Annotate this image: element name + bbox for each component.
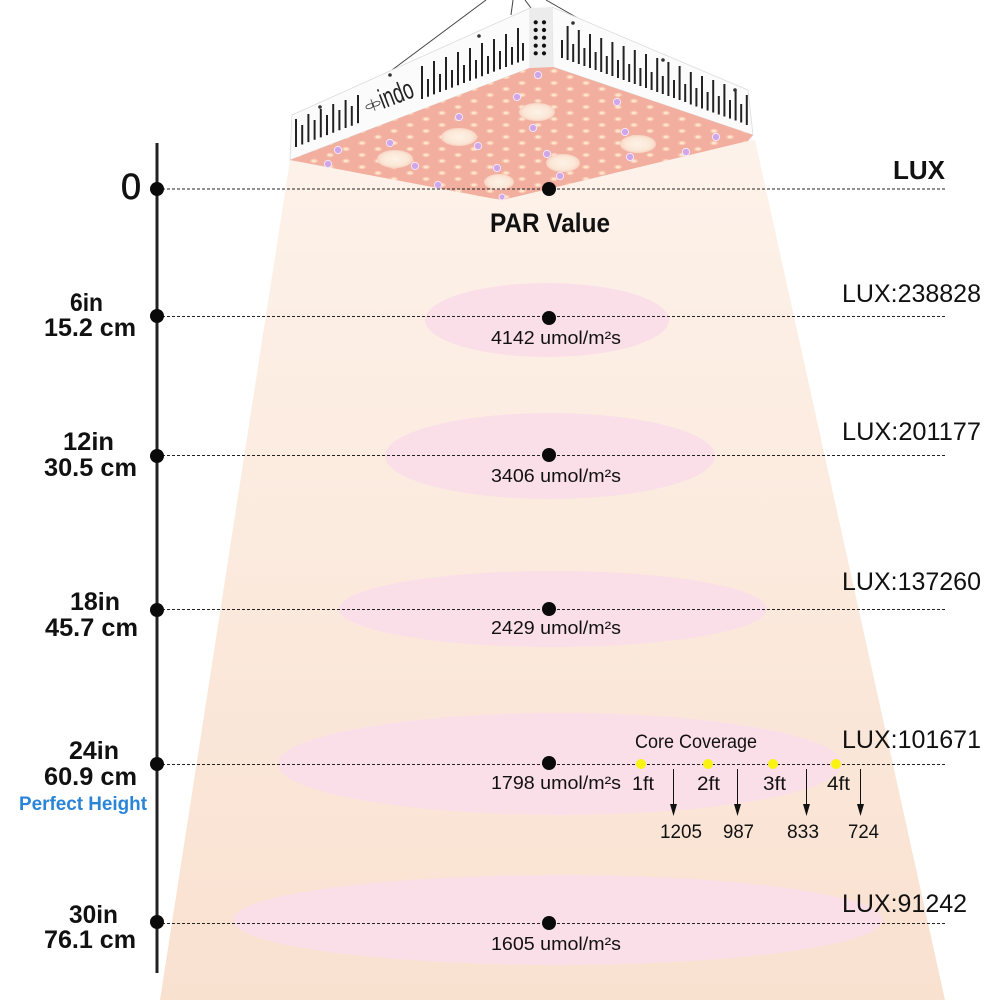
LUX values: LUX:101671 bbox=[842, 726, 981, 754]
coverage ellipses bbox=[233, 283, 883, 965]
distance labels: 3ft bbox=[763, 774, 787, 795]
height labels: 30in bbox=[69, 901, 118, 929]
PAR values: 1798 umol/m²s bbox=[491, 773, 621, 793]
height labels: 24in bbox=[69, 737, 119, 765]
perfect height callout: Perfect Height bbox=[19, 794, 148, 815]
distance labels bbox=[632, 774, 851, 795]
LUX values bbox=[842, 280, 981, 918]
height labels: 15.2 cm bbox=[44, 314, 136, 342]
light beam bbox=[160, 140, 945, 1000]
grow light fixture bbox=[290, 0, 753, 200]
height labels: 6in bbox=[70, 289, 103, 317]
distance labels: 2ft bbox=[697, 774, 721, 795]
LUX values: LUX:137260 bbox=[842, 568, 981, 596]
LED panel bbox=[290, 67, 753, 200]
fixture housing faces bbox=[290, 8, 530, 160]
coverage values: 724 bbox=[848, 822, 879, 843]
vertical height axis bbox=[156, 143, 158, 973]
coverage values: 987 bbox=[723, 822, 754, 843]
height labels: 18in bbox=[70, 588, 120, 616]
screws bbox=[318, 21, 737, 109]
PAR values: 4142 umol/m²s bbox=[491, 328, 621, 348]
brand logo bbox=[364, 73, 418, 115]
core coverage detail bbox=[632, 732, 879, 843]
height labels: 30.5 cm bbox=[44, 454, 137, 482]
LUX values: LUX:201177 bbox=[842, 418, 981, 446]
core coverage heading: Core Coverage bbox=[635, 732, 757, 753]
LUX heading: LUX bbox=[893, 155, 946, 185]
dashed level lines bbox=[157, 189, 946, 924]
center vent holes bbox=[534, 20, 546, 55]
arrows bbox=[670, 769, 864, 816]
height labels: 76.1 cm bbox=[44, 926, 136, 954]
hanging wires bbox=[392, 0, 588, 70]
distance labels: 1ft bbox=[632, 774, 655, 795]
height labels: 0 bbox=[121, 166, 141, 207]
center dots bbox=[542, 182, 556, 930]
coverage values: 833 bbox=[787, 822, 819, 843]
PAR values: 2429 umol/m²s bbox=[491, 618, 621, 638]
distance labels: 4ft bbox=[827, 774, 851, 795]
COB lenses bbox=[377, 103, 656, 190]
height labels: 12in bbox=[63, 428, 114, 456]
yellow distance markers bbox=[636, 759, 841, 769]
vents bbox=[296, 26, 747, 147]
purple LEDs bbox=[324, 71, 720, 200]
brand logo: indo bbox=[374, 73, 418, 115]
LUX values: LUX:91242 bbox=[842, 890, 967, 918]
coverage values bbox=[660, 822, 879, 843]
PAR values: 1605 umol/m²s bbox=[491, 934, 621, 954]
PAR values bbox=[491, 328, 621, 954]
height labels: 60.9 cm bbox=[44, 763, 137, 791]
height labels: 45.7 cm bbox=[45, 614, 138, 642]
PAR heading: PAR Value bbox=[490, 208, 610, 238]
coverage values: 1205 bbox=[660, 822, 702, 843]
PAR values: 3406 umol/m²s bbox=[491, 466, 621, 486]
axis dots bbox=[150, 182, 164, 929]
height labels bbox=[44, 166, 141, 954]
LUX values: LUX:238828 bbox=[842, 280, 981, 308]
